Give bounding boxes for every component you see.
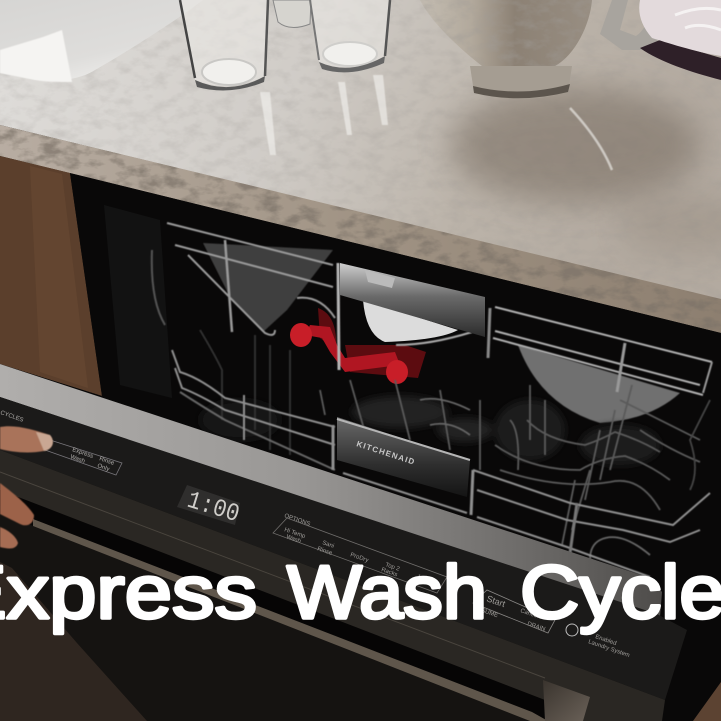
- options label group: OPTIONS: [283, 513, 311, 528]
- plate stack: [630, 0, 721, 80]
- glass one: [180, 0, 268, 91]
- options label group: ProDry: [349, 552, 369, 564]
- lower door front: [0, 513, 530, 721]
- countertop: [0, 0, 721, 340]
- red wash arm: [290, 308, 426, 384]
- glass reflections on counter: [260, 75, 612, 170]
- upper rack wires: [152, 223, 712, 395]
- lower tine holder with logo: KITCHENAID: [355, 439, 417, 467]
- lower tine holder with logo: [337, 417, 470, 497]
- glassware in upper rack: [203, 243, 333, 332]
- handle steel strip: [33, 519, 548, 721]
- handle end block: [543, 680, 590, 721]
- hand on door: [0, 426, 53, 548]
- cycle buttons label group: [0, 410, 122, 475]
- glass three: [310, 0, 390, 72]
- options label group: Hi Temp: [283, 527, 307, 540]
- upper tine holder: [340, 263, 485, 337]
- lower rack wires: [172, 350, 710, 577]
- bowl handle: [600, 0, 670, 50]
- options label group: [273, 513, 630, 659]
- dark lower rack tines: [200, 330, 710, 560]
- options label group: Cancel: [519, 608, 539, 620]
- glass two: [273, 0, 311, 28]
- cycle buttons label group: Wash: [69, 454, 86, 465]
- stand mixer bowl: [420, 0, 670, 99]
- right cabinet corner: [693, 682, 721, 721]
- title: Cycle: [520, 550, 721, 634]
- cycle buttons label group: Express: [71, 447, 94, 460]
- options label group: Top 2: [384, 562, 401, 573]
- cycle buttons label group: Rinse: [98, 456, 115, 467]
- options label group: Start: [485, 593, 507, 609]
- time display: 1:00: [184, 486, 243, 529]
- options label group: Laundry System: [587, 639, 630, 659]
- sink basin: [0, 0, 203, 82]
- cycle buttons label group: Only: [96, 463, 110, 473]
- dish clutter in lower rack: [200, 396, 660, 465]
- title: Wash: [287, 550, 487, 634]
- counter front edge: [0, 125, 721, 333]
- options label group: 1-24 Hr: [416, 574, 437, 586]
- dishwasher interior: [0, 173, 721, 721]
- options label group: RESUME: [472, 605, 499, 619]
- title: [0, 550, 721, 634]
- options label group: Racks: [380, 567, 398, 578]
- options label group: Wash: [285, 534, 302, 545]
- options label group: Sani: [321, 540, 335, 550]
- floor trim: [0, 562, 147, 721]
- options label group: DRAIN: [526, 621, 546, 633]
- options label group: Rinse: [316, 546, 333, 557]
- bowl glass base: [470, 66, 572, 99]
- options label group: Enabled: [594, 634, 617, 647]
- wood cabinet: [0, 156, 102, 396]
- cycle buttons label group: CYCLES: [0, 410, 24, 424]
- door handle band: [0, 450, 665, 721]
- control panel: [0, 397, 687, 700]
- drinking glasses: [180, 0, 390, 91]
- dishwasher door: [0, 364, 721, 721]
- white bowl: [363, 300, 458, 342]
- plate in lower rack: [518, 345, 680, 423]
